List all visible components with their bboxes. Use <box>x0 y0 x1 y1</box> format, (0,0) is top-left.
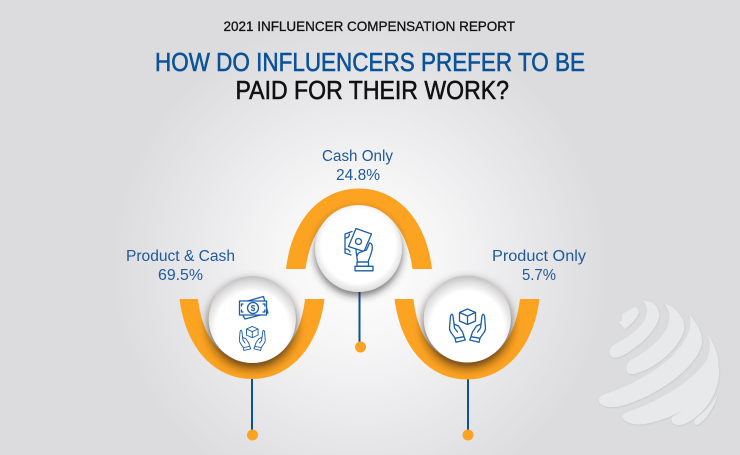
value: 5.7%: 5.7% <box>522 267 556 284</box>
connector dot <box>247 430 258 440</box>
label: Cash Only: Cash Only <box>322 148 393 165</box>
connector dot <box>462 430 474 440</box>
icon: cash bills <box>240 296 268 319</box>
connector line <box>251 379 253 432</box>
icon: cash bills: $ <box>251 304 256 313</box>
title line two: PAID FOR THEIR WORK? <box>236 77 509 105</box>
report subtitle: 2021 INFLUENCER COMPENSATION REPORT <box>224 19 516 34</box>
white circle <box>209 276 296 363</box>
icon: hands holding box <box>239 326 265 350</box>
value: 24.8%: 24.8% <box>336 167 380 184</box>
connector dot <box>355 342 366 352</box>
item: Product & Cash <box>126 248 324 440</box>
orange arc <box>394 299 540 380</box>
connector line <box>467 379 469 432</box>
title line one: HOW DO INFLUENCERS PREFER TO BE <box>155 49 585 77</box>
label: Product Only: Product Only <box>492 248 586 265</box>
white circle <box>315 205 402 292</box>
connector line <box>358 290 360 344</box>
globe watermark <box>599 301 719 425</box>
title <box>155 49 585 105</box>
label: Product & Cash: Product & Cash <box>126 248 235 265</box>
orange arc <box>180 299 324 379</box>
value: 69.5%: 69.5% <box>158 267 203 284</box>
item: Product Only <box>394 248 586 440</box>
white circle <box>424 276 511 362</box>
icon: hands holding box <box>450 309 486 342</box>
icon: hand holding cash <box>345 228 373 271</box>
orange arc <box>286 188 432 269</box>
item: Cash Only <box>286 148 432 352</box>
